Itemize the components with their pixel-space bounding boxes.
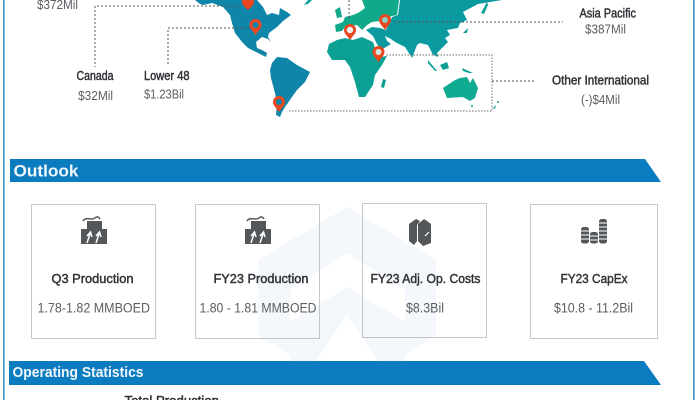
watermark logo <box>258 207 436 361</box>
map: north america <box>195 0 291 57</box>
panel: fy23 capex: FY23 CapEx <box>560 271 628 286</box>
panel: fy23 production <box>196 204 320 338</box>
panel: fy23 adjusted operating costs <box>362 204 486 338</box>
icon: factory <box>81 217 107 244</box>
panel: fy23 capex <box>530 204 658 338</box>
panel: q3 production <box>32 204 156 338</box>
label: asia pacific <box>580 6 636 36</box>
connector: lower 48 <box>168 28 250 66</box>
label: lower 48: Lower 48 <box>144 69 190 83</box>
connector: canada <box>95 6 239 67</box>
label: lower 48: $1.23Bil <box>144 88 184 102</box>
panel: q3 production: 1.78-1.82 MMBOED <box>38 300 150 316</box>
label: canada: $32Mil <box>78 89 113 103</box>
pin: east africa <box>372 46 384 62</box>
label: asia pacific: Asia Pacific <box>580 6 636 20</box>
banner: operating statistics: Operating Statistics <box>12 365 144 381</box>
pin: argentina <box>273 96 285 112</box>
world map <box>95 0 563 117</box>
map: australia <box>443 77 478 101</box>
panel: fy23 production: FY23 Production <box>214 271 308 286</box>
map: africa <box>327 37 387 97</box>
panel: fy23 capex: $10.8 - 11.2Bil <box>554 300 633 316</box>
icon: factory <box>245 217 271 244</box>
label: canada: Canada <box>76 69 114 83</box>
banner: outlook <box>10 159 661 182</box>
pin: lower 48 <box>250 19 262 35</box>
icon: books <box>409 219 431 246</box>
map pins <box>242 0 391 112</box>
connector: asia pacific <box>394 21 563 23</box>
map: asia <box>366 0 502 58</box>
connector: other international <box>289 55 492 111</box>
panel: fy23 adjusted operating costs: $8.3Bil <box>406 300 444 316</box>
label: lower 48 <box>144 69 190 102</box>
label: other international: Other International <box>552 74 649 88</box>
panel: fy23 adjusted operating costs: FY23 Adj. Op. Costs <box>370 271 481 286</box>
label: other international <box>552 74 649 107</box>
panel: fy23 production: 1.80 - 1.81 MMBOED <box>200 300 317 316</box>
map: europe and russia <box>335 0 399 32</box>
label: asia pacific: $387Mil <box>585 22 626 36</box>
pin: north africa <box>344 24 356 40</box>
icon: coins <box>581 219 607 244</box>
map: madagascar <box>381 79 386 88</box>
pin: canada <box>242 0 254 10</box>
label: canada <box>76 69 114 103</box>
banner: outlook: Outlook <box>14 162 79 180</box>
pin: caspian <box>379 14 391 30</box>
map: indonesia and islands <box>304 0 499 109</box>
map: south america <box>270 57 310 117</box>
panel: q3 production: Q3 Production <box>52 271 134 286</box>
label: other international: (-)$4Mil <box>581 93 620 107</box>
map: britain <box>335 7 342 18</box>
banner: operating statistics <box>9 361 661 385</box>
